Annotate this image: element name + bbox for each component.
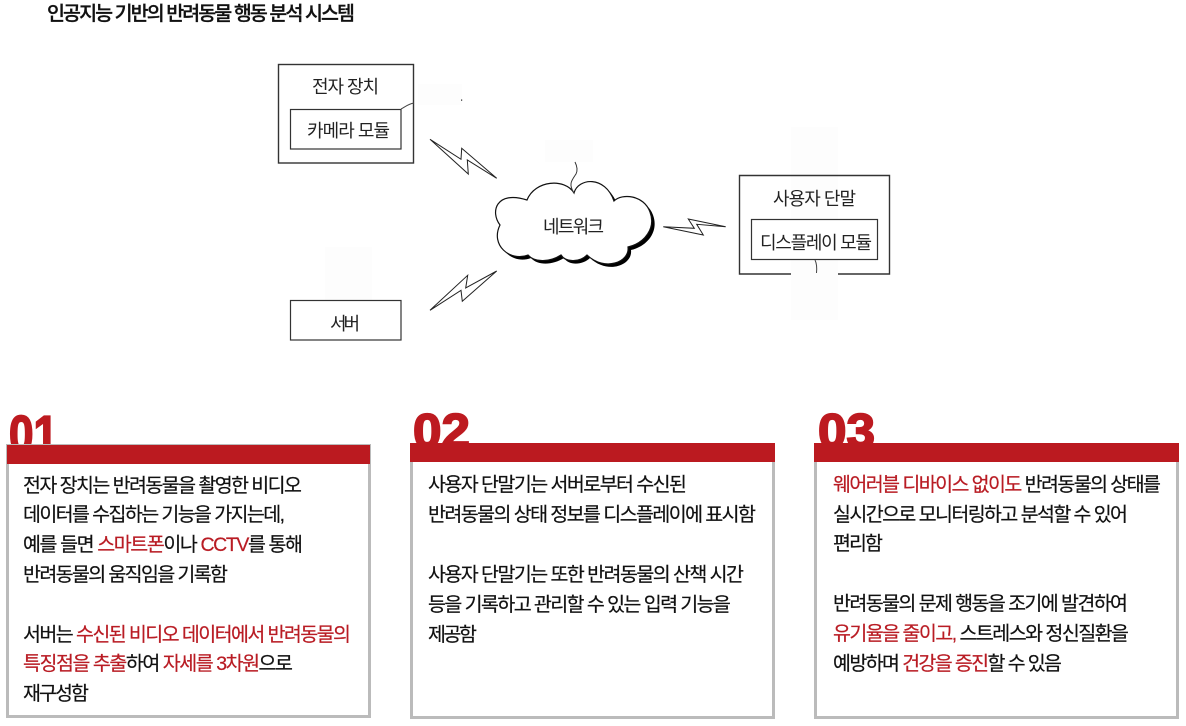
panel 02 [410,406,775,718]
arrow: lightning server to network [430,271,497,310]
camera module box [290,110,401,149]
panel 01 text [23,475,351,705]
number 02: 02 [413,406,470,458]
panel 02 text: 반려동물의 상태 정보를 디스플레이에 표시함 [428,504,756,526]
panel 02 text: 제공함 [428,624,477,646]
display module box: 디스플레이 모듈 [760,233,872,253]
network cloud: 네트워크 [543,217,604,237]
panel 01 text: 서버는 수신된 비디오 데이터에서 반려동물의 [23,624,351,646]
panel 03 text [833,474,1161,675]
network cloud [496,162,655,267]
server box: 서버 [330,314,360,334]
electronic device box: 전자 장치 [312,77,379,97]
arrow: lightning network to terminal [663,219,726,235]
display module box [752,220,878,260]
panel 03 text: 예방하며 건강을 증진할 수 있음 [833,653,1062,675]
panel 01 text: 반려동물의 움직임을 기록함 [23,564,228,586]
panel 03 [814,406,1179,718]
diagram: system overview [278,64,890,340]
panel 01 text: 예를 들면 스마트폰이나 CCTV를 통해 [23,534,303,556]
server box [290,300,401,340]
panel 03 text: 실시간으로 모니터링하고 분석할 수 있어 [833,504,1128,526]
panel 03 text: 편리함 [833,533,883,555]
user terminal box [740,176,890,274]
panel 02 text [428,474,756,646]
user terminal box: 사용자 단말 [773,189,856,209]
number 03: 03 [818,406,875,458]
panel 03 text: 유기율을 줄이고, 스트레스와 정신질환을 [833,623,1129,645]
panel 01 text: 특징점을 추출하여 자세를 3차원으로 [23,653,293,675]
panel 02 text: 사용자 단말기는 서버로부터 수신된 [428,474,687,496]
panel 01 text: 데이터를 수집하는 기능을 가지는데, [23,504,285,526]
panel 01 text: 재구성함 [23,683,89,705]
arrow: lightning device to network [430,139,497,178]
panel 02 text: 사용자 단말기는 또한 반려동물의 산책 시간 [428,564,744,586]
title: 인공지능 기반의 반려동물 행동 분석 시스템 [47,3,355,25]
panel 03 text: 반려동물의 문제 행동을 조기에 발견하여 [833,593,1128,615]
panel 01 [7,406,370,716]
panel 03 text: 웨어러블 디바이스 없이도 반려동물의 상태를 [833,474,1161,496]
panel 01 text: 전자 장치는 반려동물을 촬영한 비디오 [23,475,302,497]
panel 02 text: 등을 기록하고 관리할 수 있는 입력 기능을 [428,594,731,616]
electronic device box [278,64,462,163]
camera module box: 카메라 모듈 [307,121,390,141]
number 01: 01 [9,406,58,464]
